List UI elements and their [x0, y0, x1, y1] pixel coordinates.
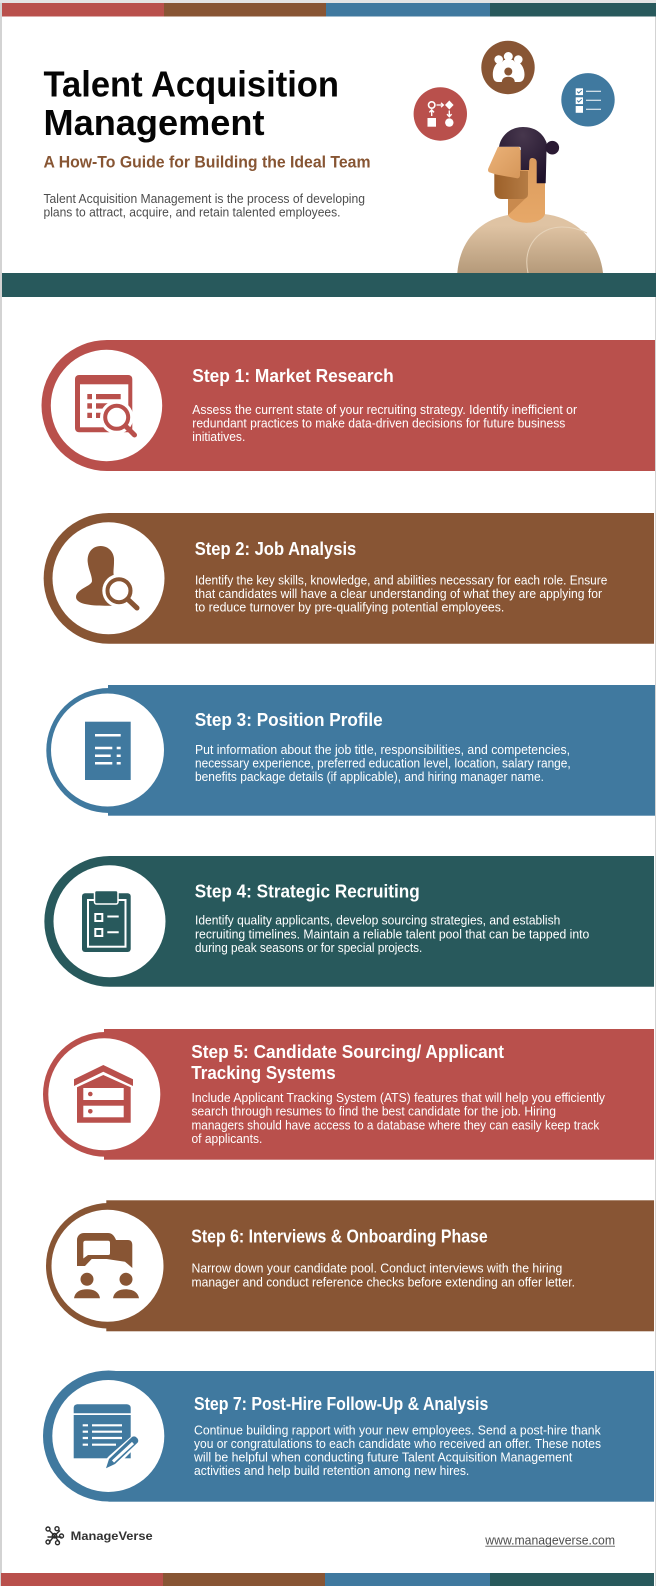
icon: brown team bubble: [481, 41, 535, 94]
title: Management: [44, 102, 265, 143]
step 7 band: [43, 1370, 654, 1502]
step 6 body: [192, 1261, 575, 1289]
step 5 body: managers should have access to a database where they can easily keep track: [192, 1117, 600, 1132]
step 2 body: that candidates will have a clear understanding of what they are applying for: [195, 586, 603, 601]
title: Talent Acquisition: [44, 64, 339, 105]
step 1 icon: report search: [51, 350, 162, 461]
step 4 body: during peak seasons or for special projects.: [195, 940, 422, 955]
step 7 body: Continue building rapport with your new employees. Send a post-hire thank: [194, 1422, 601, 1437]
panel: step 7: [43, 1370, 654, 1502]
step 7 body: activities and help build retention among new hires.: [194, 1463, 469, 1478]
logo: ManageVerse: [46, 1527, 153, 1545]
panel: step 1: [42, 340, 655, 471]
step 2 body: to reduce turnover by pre-qualifying potential employees.: [195, 600, 504, 614]
step 1 body: [192, 402, 578, 444]
step 6 body: manager and conduct reference checks before extending an offer letter.: [192, 1274, 575, 1289]
step 1 body: redundant practices to make data-driven decisions for future business: [192, 416, 566, 431]
icon: network mark: [46, 1527, 64, 1545]
step 3 heading: Step 3: Position Profile: [195, 709, 383, 730]
panel: step 3: [46, 685, 655, 816]
step 4 icon: clipboard: [54, 865, 166, 977]
step 5 icon: storage house: [48, 1038, 160, 1150]
website link: www.manageverse.com: [484, 1532, 615, 1547]
step 6 heading: Step 6: Interviews & Onboarding Phase: [191, 1225, 488, 1246]
step 1 band: [42, 340, 655, 471]
step 1 body: initiatives.: [192, 429, 245, 444]
step 4 body: Identify quality applicants, develop sourcing strategies, and establish: [195, 913, 560, 928]
top colour bar: [2, 3, 656, 16]
step 3 body: benefits package details (if applicable), and hiring manager name.: [195, 769, 544, 784]
step 2 band: [44, 513, 654, 644]
step 5 heading: Tracking Systems: [191, 1062, 336, 1083]
step 2 heading: Step 2: Job Analysis: [195, 538, 356, 559]
step 3 body: Put information about the job title, responsibilities, and competencies,: [195, 742, 570, 757]
bottom colour bar: [1, 1573, 654, 1586]
step 4 body: recruiting timelines. Maintain a reliable talent pool that can be tapped into: [195, 926, 589, 941]
step 6 band: [46, 1200, 654, 1331]
step 5 body: of applicants.: [192, 1131, 262, 1146]
step 6 body: Narrow down your candidate pool. Conduct interviews with the hiring: [192, 1261, 562, 1276]
step 2 body: Identify the key skills, knowledge, and abilities necessary for each role. Ensure: [195, 572, 607, 587]
step 5 body: [192, 1090, 605, 1146]
step 4 heading: Step 4: Strategic Recruiting: [195, 880, 420, 901]
step 3 band: [46, 685, 655, 816]
step 2 icon: candidate search: [52, 522, 164, 634]
subtitle: A How-To Guide for Building the Ideal Team: [44, 154, 370, 172]
step 4 band: [44, 856, 654, 987]
icon: red workflow bubble: [414, 87, 467, 141]
title: [44, 64, 339, 143]
step 5 body: Include Applicant Tracking System (ATS) features that will help you efficiently: [192, 1090, 605, 1105]
step 5 heading: Step 5: Candidate Sourcing/ Applicant: [191, 1041, 504, 1062]
step 7 icon: form and pencil: [52, 1380, 164, 1492]
step 5 heading: [191, 1041, 504, 1083]
step 5 band: [43, 1029, 654, 1160]
step 1 body: Assess the current state of your recruiting strategy. Identify inefficient or: [192, 402, 578, 417]
logo wordmark: ManageVerse: [71, 1531, 153, 1543]
icon: blue checklist bubble: [561, 73, 615, 127]
step 5 body: search through resumes to find the best candidate for the job. Hiring: [192, 1104, 556, 1119]
step 6 icon: interview: [52, 1210, 164, 1322]
intro text: plans to attract, acquire, and retain talented employees.: [44, 205, 340, 220]
step 7 body: you or congratulations to each candidate who received an offer. These notes: [194, 1436, 601, 1451]
panel: step 5: [43, 1029, 654, 1160]
intro text: [44, 191, 365, 220]
intro text: Talent Acquisition Management is the process of developing: [44, 191, 365, 206]
panel: step 6: [46, 1200, 654, 1331]
step 3 icon: document: [51, 694, 164, 806]
step 2 body: [195, 572, 607, 614]
step 3 body: [195, 742, 571, 784]
step 3 body: necessary experience, preferred education level, location, salary range,: [195, 756, 571, 771]
panel: step 4: [44, 856, 654, 987]
step 7 body: will be helpful when conducting future Talent Acquisition Management: [193, 1449, 573, 1464]
header band: [2, 273, 656, 297]
step 7 body: [193, 1422, 601, 1478]
step 7 heading: Step 7: Post-Hire Follow-Up & Analysis: [194, 1393, 488, 1414]
panel: step 2: [44, 513, 654, 644]
step 4 body: [195, 913, 589, 955]
step 1 heading: Step 1: Market Research: [192, 365, 394, 386]
illustration: person: [457, 127, 603, 273]
